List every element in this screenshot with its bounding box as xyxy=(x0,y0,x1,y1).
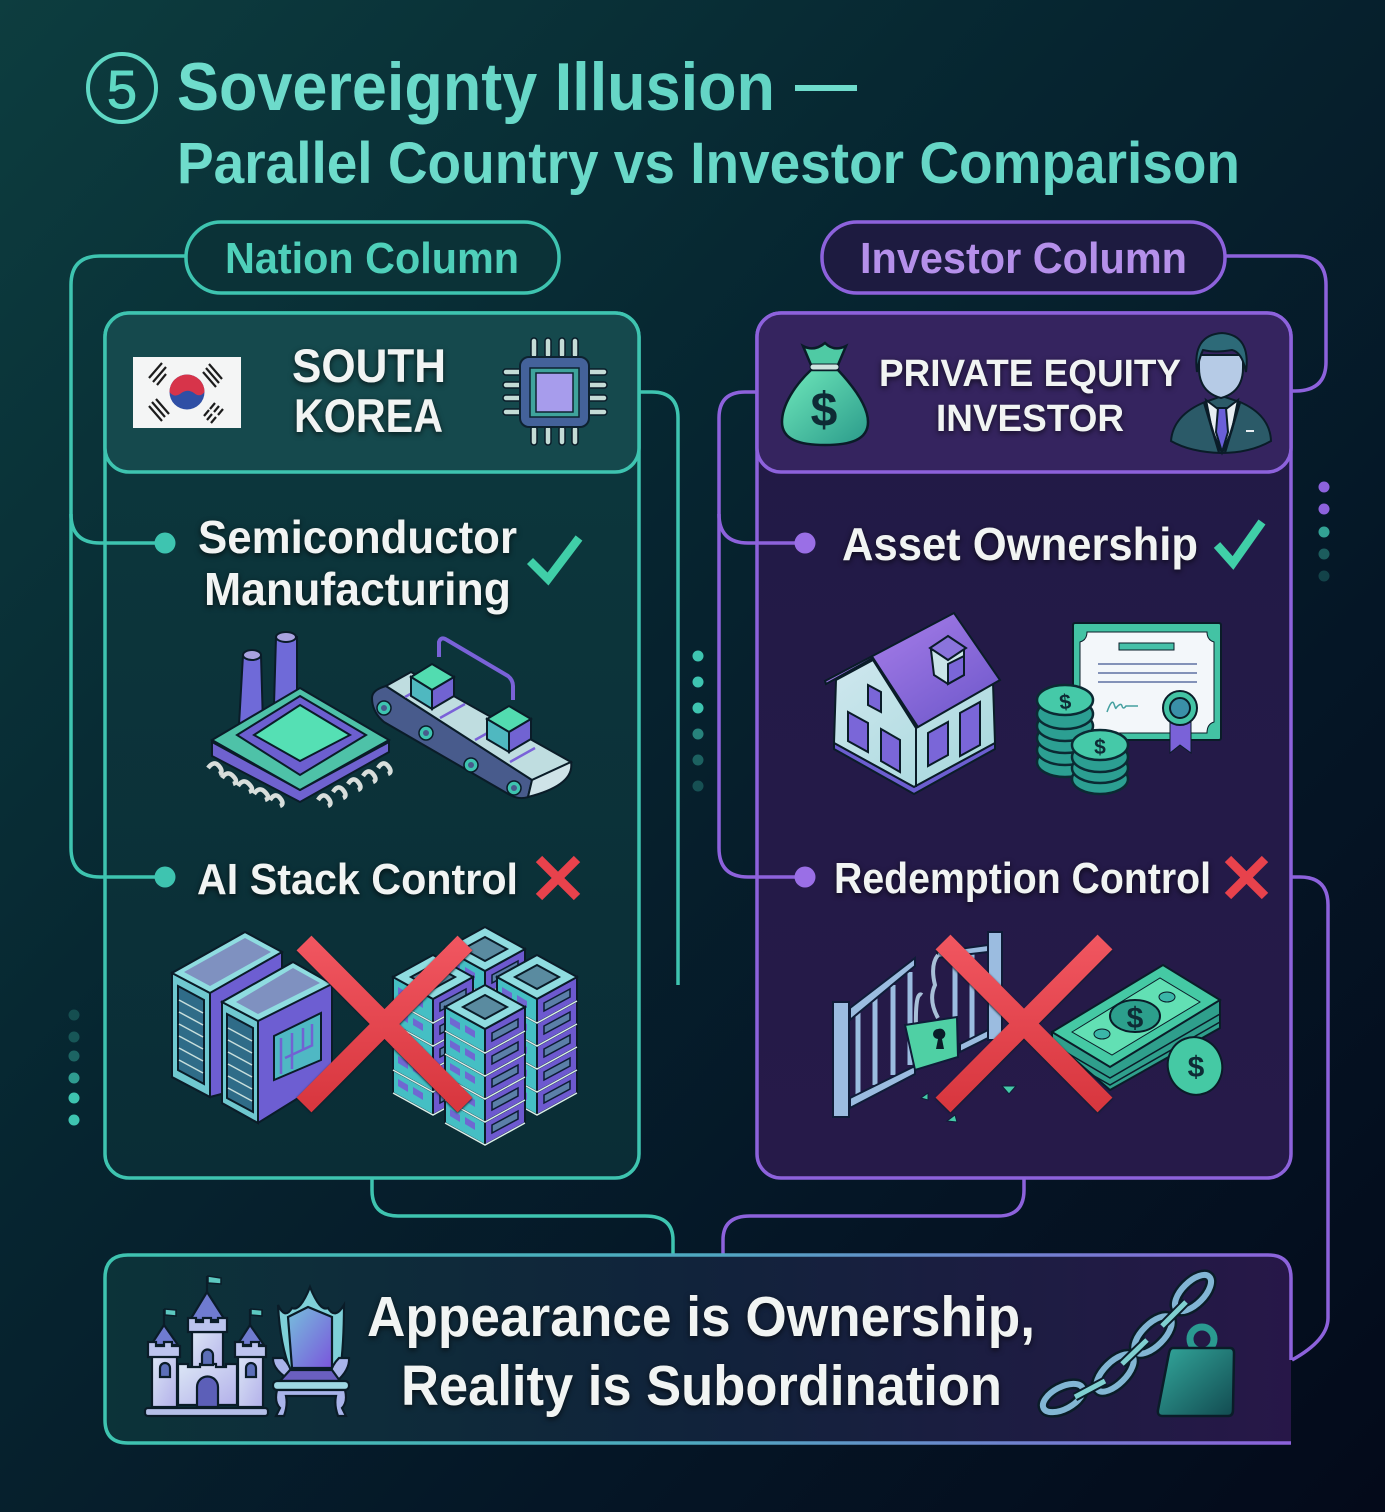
icon: house xyxy=(825,613,1000,794)
title line 2: Parallel Country vs Investor Comparison xyxy=(177,131,1240,196)
icon: server racks xyxy=(172,932,332,1123)
header text: Private Equity Investor: PRIVATE EQUITY xyxy=(879,353,1181,395)
conclusion text xyxy=(367,1285,1035,1418)
conclusion text: Appearance is Ownership, xyxy=(367,1285,1035,1349)
pill: Investor Column: Investor Column xyxy=(860,234,1187,283)
panel: conclusion xyxy=(105,1255,1291,1443)
item: AI Stack Control: AI Stack Control xyxy=(197,855,518,904)
decorative dots: left xyxy=(68,1010,80,1126)
icon: certificate and coins xyxy=(1037,623,1221,794)
icon: weight xyxy=(1158,1327,1234,1416)
icon: server stacks xyxy=(393,927,577,1145)
icon: conveyor belt xyxy=(372,638,571,798)
icon: money bag xyxy=(782,343,868,445)
icon: businessman xyxy=(1171,333,1271,453)
nation header xyxy=(105,313,639,472)
item: Asset Ownership: Asset Ownership xyxy=(842,518,1198,570)
icon: certificate and coins: $ xyxy=(1058,690,1073,715)
icon: castle xyxy=(145,1276,268,1416)
number badge: 5 xyxy=(107,60,137,120)
header text: South Korea xyxy=(292,339,446,442)
item: Semiconductor Manufacturing: Semiconductor xyxy=(198,511,517,563)
item: Redemption Control: Redemption Control xyxy=(834,854,1211,903)
investor header xyxy=(757,313,1291,472)
decorative dots: center xyxy=(692,650,704,792)
icon: large red cross xyxy=(304,943,465,1105)
icon: microchip xyxy=(503,338,607,445)
icon: red cross xyxy=(539,859,577,897)
icon: chain xyxy=(1038,1269,1217,1418)
panel: investor xyxy=(757,313,1291,1178)
icon: stack of cash and coin xyxy=(1052,965,1230,1102)
icon: money bag: $ xyxy=(811,384,838,437)
title line 1: Sovereignty Illusion xyxy=(177,49,775,125)
icon: check xyxy=(1217,522,1262,563)
item: Semiconductor Manufacturing: Manufacturing xyxy=(204,563,511,615)
icon: check xyxy=(530,538,579,579)
header text: Private Equity Investor xyxy=(879,353,1181,440)
icon: throne xyxy=(273,1287,349,1416)
icon: stack of cash and coin: $ xyxy=(1127,1002,1144,1035)
title xyxy=(88,49,1240,196)
pill: Investor Column xyxy=(822,222,1225,293)
header text: South Korea: KOREA xyxy=(294,389,443,442)
connector lines: nation xyxy=(71,256,678,1254)
icon: South Korea flag xyxy=(133,357,241,428)
icon: red cross xyxy=(1228,859,1265,896)
header text: Private Equity Investor: INVESTOR xyxy=(936,398,1124,440)
pill: Nation Column xyxy=(186,222,559,293)
item: Semiconductor Manufacturing xyxy=(154,511,579,615)
connector lines: investor xyxy=(719,256,1328,1360)
icon: large red cross xyxy=(943,942,1105,1105)
panel: nation xyxy=(105,313,639,1178)
conclusion text: Reality is Subordination xyxy=(401,1354,1002,1418)
icon: chip factory xyxy=(208,632,390,806)
pill: Nation Column: Nation Column xyxy=(225,234,519,283)
icon: stack of cash and coin: $ xyxy=(1188,1051,1205,1084)
number badge xyxy=(88,54,156,122)
decorative dots: right xyxy=(1318,482,1330,582)
icon: certificate and coins: $ xyxy=(1094,736,1106,759)
header text: South Korea: SOUTH xyxy=(292,339,446,392)
icon: broken gate and lock xyxy=(833,932,1016,1122)
